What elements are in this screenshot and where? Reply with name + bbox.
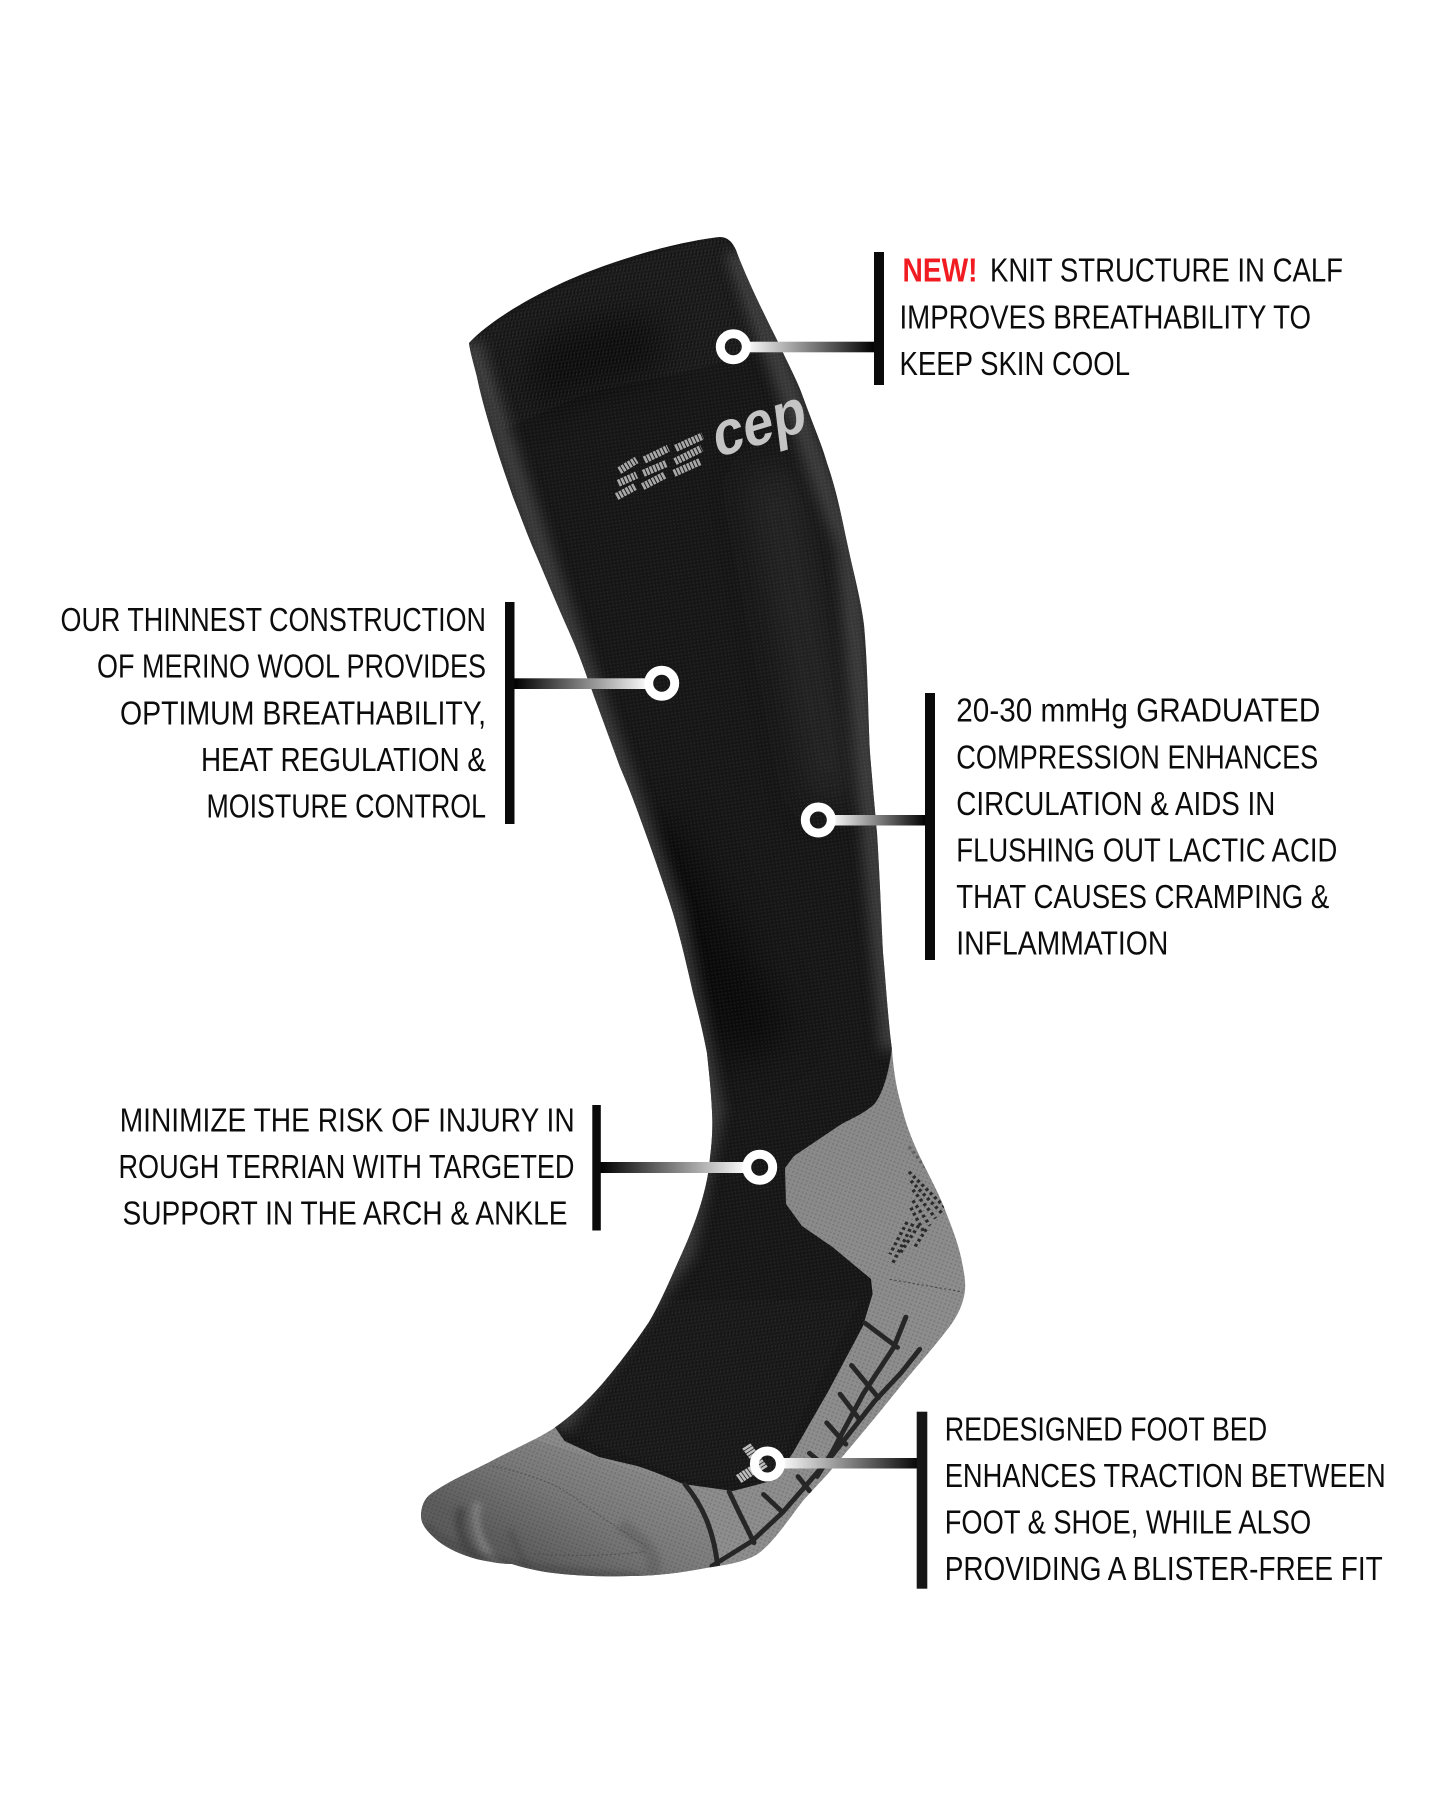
marker ring: [805, 807, 831, 833]
text: compression: COMPRESSION ENHANCES: [956, 739, 1318, 776]
toe cap: [421, 1440, 715, 1576]
text: knit structure: IMPROVES BREATHABILITY TO: [900, 299, 1311, 336]
text: arch and ankle: ROUGH TERRIAN WITH TARGETED: [118, 1149, 574, 1186]
leader line: [745, 342, 875, 352]
toe shading folds: [425, 1502, 654, 1578]
sock edge highlight: [469, 250, 892, 1426]
leader line: [779, 1458, 922, 1468]
cuff band: [540, 327, 648, 391]
text: knit structure: KNIT STRUCTURE IN CALF: [990, 253, 1343, 290]
text: arch and ankle: MINIMIZE THE RISK OF INJURY IN: [120, 1103, 575, 1140]
marker ring: [754, 1451, 780, 1477]
text: knit structure: [900, 253, 1343, 383]
text: merino wool: OUR THINNEST CONSTRUCTION: [60, 602, 486, 639]
callout: foot bed: [754, 1412, 1386, 1589]
vertical bar: [917, 1412, 927, 1589]
text: compression: 20-30 mmHg GRADUATED: [956, 693, 1320, 730]
text: compression: CIRCULATION & AIDS IN: [956, 786, 1275, 823]
text: foot bed: [945, 1412, 1386, 1588]
black upper of sock: [469, 237, 892, 1491]
small logo mark on foot: [739, 1446, 764, 1479]
text: knit structure: KEEP SKIN COOL: [900, 346, 1130, 383]
leader line: [830, 815, 926, 826]
text: foot bed: FOOT & SHOE, WHILE ALSO: [945, 1504, 1311, 1541]
callout: knit structure in calf: [720, 252, 1343, 385]
vertical bar: [925, 693, 935, 960]
cep logo: [615, 400, 804, 500]
leader line: [600, 1162, 748, 1173]
cep logo: cep: [709, 374, 810, 472]
vertical bar: [592, 1105, 601, 1230]
text: merino wool: OF MERINO WOOL PROVIDES: [97, 649, 486, 686]
sole grip lattice: [685, 1317, 920, 1566]
text: merino wool: MOISTURE CONTROL: [206, 789, 486, 826]
text: compression: INFLAMMATION: [956, 926, 1168, 962]
sock product image: [421, 237, 966, 1576]
text: merino wool: OPTIMUM BREATHABILITY,: [120, 695, 486, 732]
text: compression: [956, 693, 1337, 962]
marker ring: [747, 1154, 773, 1180]
text: arch and ankle: SUPPORT IN THE ARCH & ANKLE: [122, 1195, 568, 1232]
callout: arch and ankle support: [118, 1103, 773, 1232]
callout: merino wool: [60, 602, 675, 826]
calf soft sheen: [770, 470, 835, 800]
text: knit structure: NEW!: [902, 253, 978, 290]
text: merino wool: HEAT REGULATION &: [201, 742, 486, 779]
callout: graduated compression: [805, 693, 1337, 962]
heel ventilation dots: [890, 1147, 963, 1292]
text: compression: FLUSHING OUT LACTIC ACID: [956, 833, 1337, 870]
text: foot bed: REDESIGNED FOOT BED: [945, 1412, 1267, 1449]
heel and sole grey knit: [421, 1040, 966, 1576]
text: compression: THAT CAUSES CRAMPING &: [956, 879, 1329, 916]
toe stitching: [492, 1466, 649, 1556]
marker ring: [720, 334, 746, 360]
vertical bar: [874, 252, 884, 385]
vertical bar: [505, 602, 514, 824]
marker ring: [649, 670, 675, 696]
text: arch and ankle: [118, 1103, 575, 1232]
leader line: [514, 678, 650, 689]
text: merino wool: [60, 602, 486, 826]
